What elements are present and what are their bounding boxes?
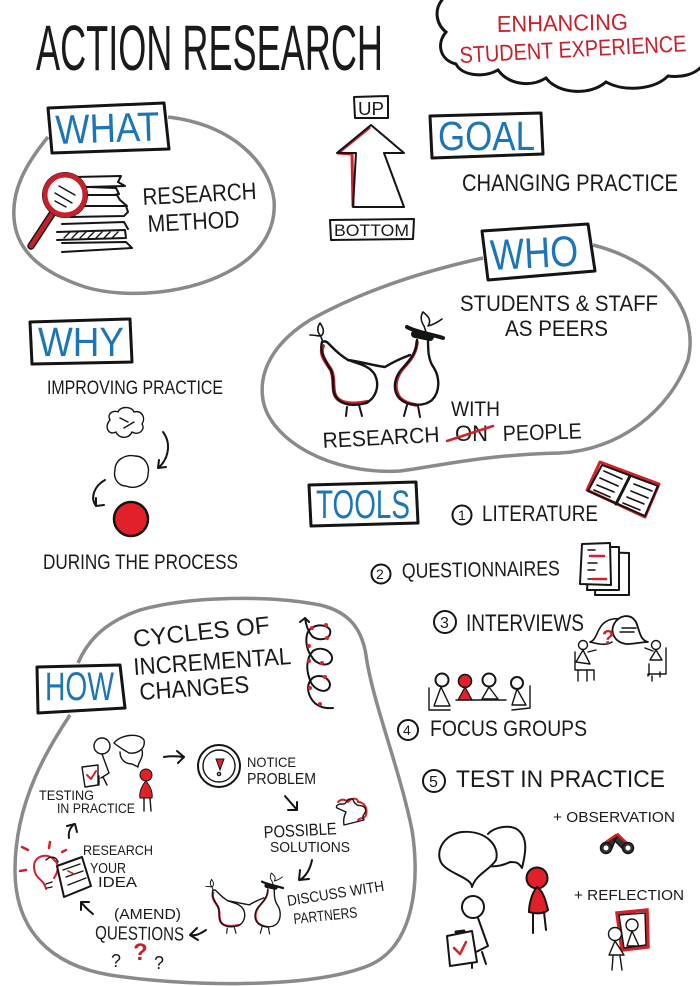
icon: puzzle piece: [336, 799, 367, 825]
cloud: enhancing student experience: [437, 0, 700, 91]
text: research with people: ON: [455, 421, 488, 446]
text: possible solutions: SOLUTIONS: [270, 839, 350, 856]
icon: spiral cycles: [300, 618, 333, 708]
heading: what: WHAT: [55, 103, 160, 153]
text: discuss with partners: PARTNERS: [293, 904, 358, 928]
heading: why: WHY: [38, 319, 124, 365]
item: test in practice: 5: [429, 774, 438, 791]
icon: arrow: [337, 125, 404, 207]
item: interviews: INTERVIEWS: [466, 610, 584, 637]
text: students and staff as peers: [460, 291, 658, 341]
text: research your idea: IDEA: [98, 875, 137, 891]
panel: who: [262, 224, 690, 471]
text: notice problem: NOTICE: [247, 754, 296, 770]
text: testing in practice: IN PRACTICE: [57, 801, 135, 816]
text: cycles of incremental changes: CHANGES: [139, 671, 250, 706]
label: up: [354, 96, 388, 119]
item: focus groups: [398, 674, 587, 741]
cloud: enhancing student experience: ENHANCING: [497, 9, 628, 37]
text: research method: RESEARCH: [142, 178, 257, 211]
item: literature: 1: [458, 507, 466, 523]
arrow: to testing: [67, 824, 77, 838]
item: test in practice: [423, 766, 684, 970]
arrow: to notice problem: [164, 751, 184, 763]
text: amend questions: (AMEND): [114, 906, 181, 923]
item: questionnaires: QUESTIONNAIRES: [402, 557, 560, 583]
panel: what: [14, 103, 274, 293]
arrow: to research idea: [81, 902, 93, 914]
text: cycles of incremental changes: CYCLES OF: [132, 612, 271, 653]
heading: goal: GOAL: [438, 113, 535, 159]
icon: testing people with bubbles: [82, 735, 152, 811]
item: focus groups: 4: [403, 722, 411, 738]
item: questionnaires: [372, 543, 629, 595]
text: improving practice: IMPROVING PRACTICE: [47, 378, 223, 399]
icon: question marks: ?: [111, 951, 121, 971]
text: research with people: RESEARCH: [322, 422, 440, 453]
icon: books and magnifier: [31, 172, 132, 252]
arrow: to questions: [190, 928, 206, 940]
arrow: to discuss: [299, 860, 312, 880]
icon: papers: [580, 543, 629, 595]
icon: person at mirror: [608, 910, 648, 970]
icon: binoculars: [600, 834, 634, 854]
label: bottom: BOTTOM: [334, 221, 409, 240]
text: possible solutions: POSSIBLE: [263, 819, 337, 842]
panel: why: [30, 319, 238, 574]
text: amend questions: QUESTIONS: [95, 923, 184, 946]
text: research with people: [322, 398, 582, 453]
text: research your idea: YOUR: [90, 860, 126, 877]
text: reflection: + REFLECTION: [574, 887, 684, 904]
text: students and staff as peers: AS PEERS: [505, 316, 608, 341]
text: research method: METHOD: [147, 206, 240, 238]
icon: warning target: [198, 745, 240, 787]
heading: tools: TOOLS: [316, 483, 410, 527]
text: discuss with partners: [286, 878, 385, 928]
heading: who: WHO: [489, 227, 579, 280]
panel: how: [15, 598, 415, 984]
title: ACTION RESEARCH: [36, 12, 383, 84]
label: up: UP: [358, 99, 384, 119]
icon: question marks: [111, 939, 164, 973]
panel: goal: [430, 113, 678, 197]
item: focus groups: FOCUS GROUPS: [430, 716, 587, 741]
text: research your idea: [83, 842, 153, 891]
item: literature: [452, 462, 659, 526]
item: interviews: [434, 610, 666, 681]
text: notice problem: PROBLEM: [247, 771, 316, 788]
item: interviews: 3: [440, 615, 449, 632]
text: amend questions: [95, 906, 184, 946]
text: possible solutions: [263, 819, 350, 856]
text: testing in practice: TESTING: [39, 788, 94, 803]
icon: lightbulb and paper: [20, 842, 91, 897]
heading: how: HOW: [45, 665, 114, 709]
text: notice problem: [247, 754, 316, 788]
item: test in practice: TEST IN PRACTICE: [456, 766, 665, 793]
icon: question marks: ?: [154, 953, 164, 973]
text: research your idea: RESEARCH: [83, 842, 153, 858]
item: literature: LITERATURE: [482, 501, 598, 526]
text: observation: + OBSERVATION: [553, 809, 675, 826]
icon: speech bubbles and people: [439, 827, 548, 968]
icon: interview with speech bubbles: [575, 616, 666, 681]
text: research with people: PEOPLE: [502, 418, 582, 446]
text: cycles of incremental changes: INCREMENTAL: [133, 643, 292, 681]
panel: tools: [309, 462, 684, 970]
icon: interview with speech bubbles: ?: [602, 627, 614, 649]
icon: open book: [587, 462, 659, 517]
item: questionnaires: 2: [376, 566, 384, 582]
text: testing in practice: [39, 788, 135, 816]
icon: two pears: [310, 312, 443, 417]
text: during the process: DURING THE PROCESS: [43, 551, 238, 574]
text: research method: [142, 178, 257, 238]
text: research with people: WITH: [451, 398, 500, 421]
text: cycles of incremental changes: [132, 612, 292, 706]
icon: group at table: [429, 674, 530, 710]
text: discuss with partners: DISCUSS WITH: [286, 878, 385, 910]
icon: process from rough to round: [93, 408, 168, 536]
text: students and staff as peers: STUDENTS & STAFF: [460, 291, 658, 316]
arrow: to possible solutions: [285, 796, 297, 810]
panel: up arrow: [330, 96, 414, 240]
icon: question marks: ?: [133, 939, 148, 966]
icon: small pears: [206, 873, 283, 934]
